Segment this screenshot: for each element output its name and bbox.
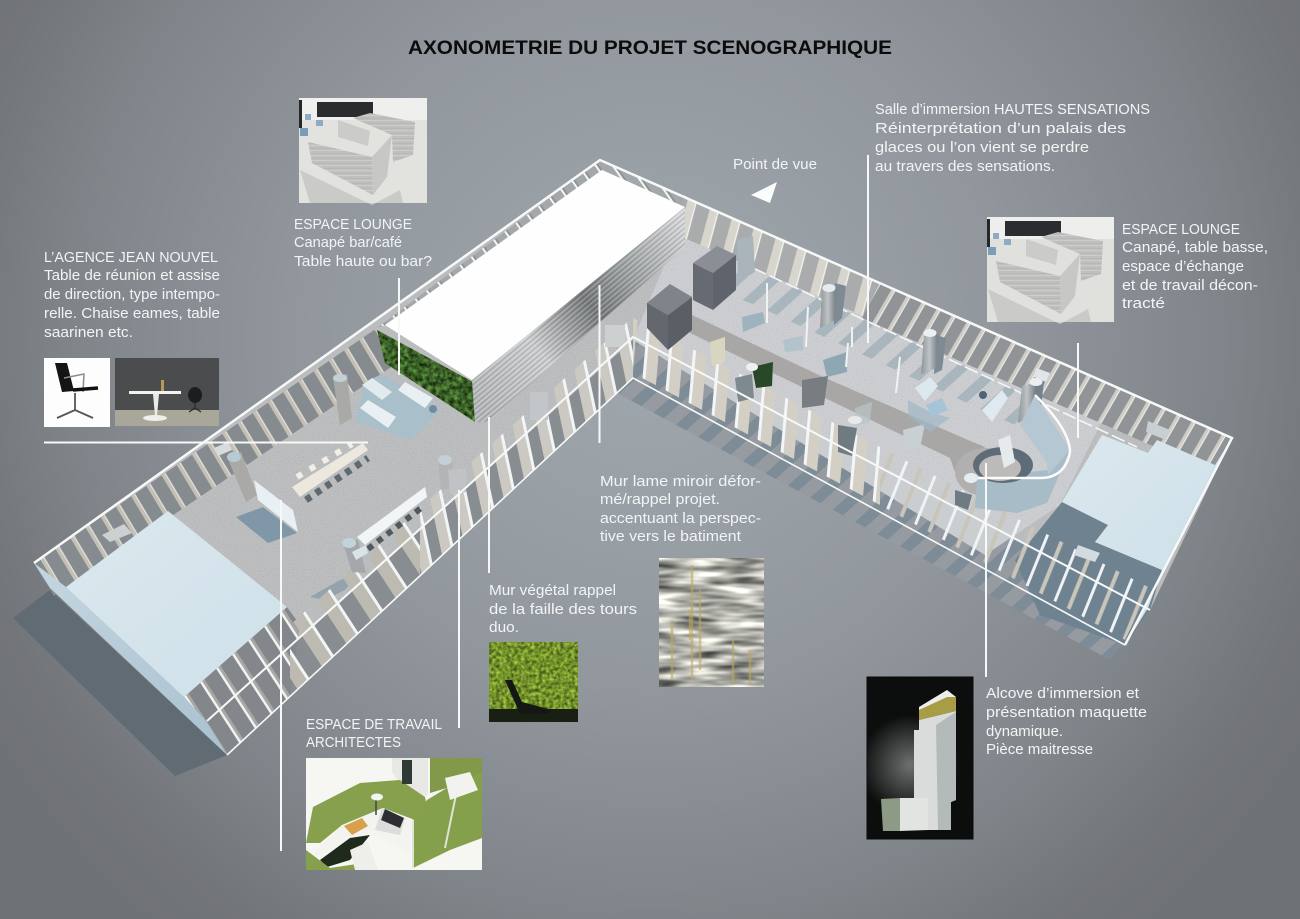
floor slab [34, 160, 1232, 721]
text: agence jean nouvel: saarinen etc. [44, 325, 133, 341]
leader line: mur lame [598, 285, 600, 443]
text: lounge left: Canapé bar/café [294, 235, 402, 251]
text: mur vegetal: Mur végétal rappel [489, 583, 616, 599]
text: lounge right [1122, 222, 1268, 312]
text: point de vue: Point de vue [733, 157, 817, 173]
leader line: espace de travail partition [280, 500, 282, 851]
text: mur lame miroir [600, 474, 761, 545]
text: lounge left [294, 217, 432, 270]
cast shadows on ground [13, 340, 1150, 776]
wall: upper right fins near entrance [675, 197, 880, 319]
photo: architects workspace [306, 758, 482, 870]
wall outlines [34, 160, 1232, 755]
text: mur lame miroir: accentuant la perspec- [600, 511, 761, 527]
text: espace de travail: ARCHITECTES [306, 735, 401, 751]
wall: upper right fins far end [862, 283, 1232, 473]
large white volume [377, 170, 685, 422]
text: lounge right: ESPACE LOUNGE [1122, 222, 1240, 238]
floor grain [60, 180, 1200, 721]
text: mur vegetal [489, 583, 637, 636]
text: mur lame miroir: mé/rappel projet. [600, 492, 720, 508]
vegetal wall face [377, 330, 475, 422]
leader line: alcove [985, 463, 987, 677]
fin shadows on right arm floor [700, 262, 1030, 432]
title: AXONOMETRIE DU PROJET SCENOGRAPHIQUE [408, 38, 892, 59]
text: mur lame miroir: tive vers le batiment [600, 529, 741, 545]
lounge zone left [355, 374, 440, 440]
photo: tower model [867, 677, 973, 839]
photo: deformed mirror [659, 558, 764, 687]
text: lounge right: Canapé, table basse, [1122, 240, 1268, 256]
roof [385, 170, 685, 380]
wall: lower left fins [290, 508, 420, 696]
text: alcove: Pièce maitresse [986, 742, 1093, 758]
partition [254, 480, 298, 532]
photo: chair [44, 358, 110, 427]
text: salle d'immersion: Salle d’immersion HAUTES SENSATIONS [875, 102, 1150, 118]
central walkway [690, 315, 985, 472]
text: agence jean nouvel: relle. Chaise eames, table [44, 306, 220, 322]
text: salle d'immersion: Réinterprétation d’un palais des [875, 121, 1126, 137]
text: salle d'immersion: au travers des sensations. [875, 159, 1055, 175]
display panels, poles and columns right arm [710, 283, 1050, 510]
text: agence jean nouvel: de direction, type intempo- [44, 287, 220, 303]
left end block [34, 511, 300, 755]
text: lounge left: Table haute ou bar? [294, 254, 432, 270]
text: lounge right: espace d’échange [1122, 259, 1244, 275]
text: agence jean nouvel [44, 250, 220, 341]
ground beneath lower left wall [205, 337, 633, 755]
right arm floor [633, 215, 1110, 555]
workspace table [357, 487, 427, 549]
text: agence jean nouvel: L’AGENCE JEAN NOUVEL [44, 250, 218, 266]
text: salle d'immersion [875, 102, 1150, 175]
wall: lower right fins far end [880, 447, 1150, 640]
left floor shadow patches [236, 507, 358, 600]
text: salle d'immersion: glaces ou l’on vient se perdre [875, 140, 1089, 156]
leader line: lounge right [1077, 343, 1079, 438]
photo: green wall [489, 642, 578, 722]
leader line: agence [44, 442, 368, 444]
photo: table [115, 358, 219, 426]
lounge armchairs right arm [908, 377, 1008, 432]
text: mur lame miroir: Mur lame miroir défor- [600, 474, 761, 490]
wall: upper left fins [34, 328, 397, 596]
inner guide line upper right [753, 268, 1137, 447]
wall: lower left fins near corner [420, 317, 633, 576]
text: alcove: Alcove d’immersion et [986, 686, 1139, 702]
text: lounge right: tracté [1122, 296, 1165, 312]
text: alcove: présentation maquette [986, 705, 1147, 721]
text: espace de travail: ESPACE DE TRAVAIL [306, 717, 442, 733]
right end block shadow [1015, 502, 1162, 645]
mirror wall face [472, 207, 685, 422]
leader line: mur vegetal [488, 417, 490, 573]
leader line: lounge left [398, 278, 400, 375]
text: alcove: dynamique. [986, 724, 1063, 740]
columns left arm [214, 325, 625, 573]
photo: lounge left [299, 98, 427, 205]
leader line: espace de travail table [458, 490, 460, 728]
text: alcove [986, 686, 1147, 758]
axonometric floor plan [13, 160, 1232, 776]
text: espace de travail [306, 717, 442, 751]
dark display boxes [647, 236, 755, 350]
conference table [292, 443, 368, 500]
wall: top edge ticks behind block [377, 160, 690, 328]
wall: lower right fins near corner [633, 318, 880, 505]
leader line: salle d'immersion [867, 155, 869, 343]
text: mur vegetal: duo. [489, 620, 519, 636]
right end block [1062, 421, 1232, 645]
alcove curved wall [955, 395, 1070, 513]
text: mur vegetal: de la faille des tours [489, 602, 637, 618]
text: agence jean nouvel: Table de réunion et assise [44, 268, 220, 284]
text: lounge right: et de travail décon- [1122, 278, 1258, 294]
icon: viewpoint arrow [751, 182, 777, 203]
photo: lounge right [987, 217, 1114, 324]
text: lounge left: ESPACE LOUNGE [294, 217, 412, 233]
